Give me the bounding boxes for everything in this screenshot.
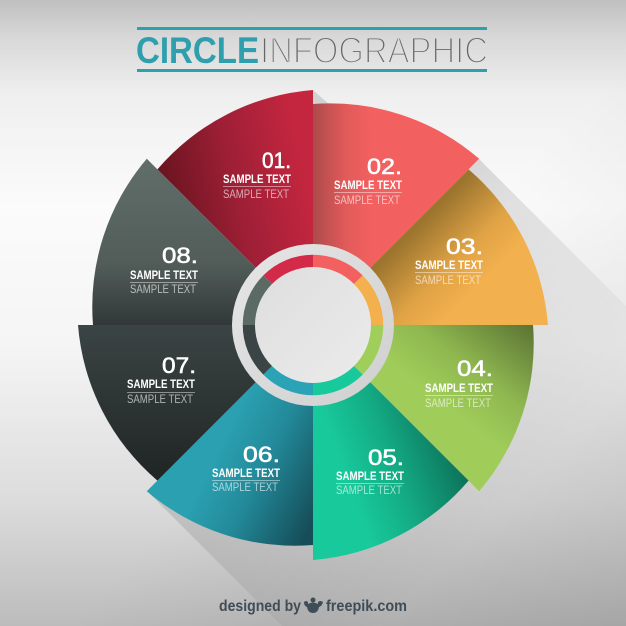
label 06 bbox=[212, 468, 280, 494]
number 08: 08. bbox=[162, 243, 198, 268]
number 02: 02. bbox=[367, 154, 402, 179]
label 08 bbox=[130, 270, 198, 296]
label 04: SAMPLE TEXT bbox=[425, 398, 491, 410]
footer credit bbox=[219, 598, 407, 615]
label 08: SAMPLE TEXT bbox=[130, 270, 198, 282]
label 02 bbox=[334, 180, 402, 207]
label 07: SAMPLE TEXT bbox=[127, 379, 195, 391]
label 02: SAMPLE TEXT bbox=[334, 180, 402, 192]
center ring bbox=[232, 244, 394, 406]
label 02: SAMPLE TEXT bbox=[334, 195, 400, 207]
number 06: 06. bbox=[243, 442, 280, 467]
label 05: SAMPLE TEXT bbox=[336, 471, 404, 483]
panel: 05 bbox=[313, 325, 469, 560]
label 07 bbox=[127, 379, 195, 406]
number 04: 04. bbox=[457, 356, 493, 381]
label 03: SAMPLE TEXT bbox=[415, 260, 483, 272]
title word: CIRCLE: CIRCLE bbox=[136, 30, 259, 71]
label 01 bbox=[223, 174, 291, 201]
label 07: SAMPLE TEXT bbox=[127, 394, 193, 406]
title bbox=[136, 27, 488, 72]
footer credit: designed by bbox=[219, 598, 301, 615]
label 01: SAMPLE TEXT bbox=[223, 189, 289, 201]
label 04: SAMPLE TEXT bbox=[425, 383, 493, 395]
label 06: SAMPLE TEXT bbox=[212, 468, 280, 480]
panel: 06 bbox=[147, 325, 313, 546]
top step shadow bbox=[313, 90, 330, 105]
panel: 03 bbox=[313, 169, 548, 325]
inner circle bbox=[255, 267, 371, 383]
panel: 07 bbox=[78, 325, 313, 481]
label 08: SAMPLE TEXT bbox=[130, 284, 196, 296]
footer credit: freepik.com bbox=[326, 598, 407, 615]
icon: freepik crown bbox=[304, 598, 323, 613]
number 01: 01. bbox=[262, 148, 291, 173]
label 06: SAMPLE TEXT bbox=[212, 482, 278, 494]
ring segments bbox=[249, 261, 377, 389]
number 05: 05. bbox=[368, 445, 404, 470]
label 04 bbox=[425, 383, 493, 410]
panel: 01 bbox=[157, 90, 313, 325]
label 03: SAMPLE TEXT bbox=[415, 275, 481, 287]
label 03 bbox=[415, 260, 483, 287]
long shadow of the circle bbox=[147, 159, 626, 626]
number 03: 03. bbox=[446, 234, 483, 259]
panel: 02 bbox=[313, 103, 479, 325]
number 07: 07. bbox=[162, 353, 196, 378]
title word: INFOGRAPHIC: INFOGRAPHIC bbox=[260, 29, 488, 71]
label 01: SAMPLE TEXT bbox=[223, 174, 291, 186]
label 05 bbox=[336, 471, 404, 497]
panel: 08 bbox=[92, 159, 313, 325]
label 05: SAMPLE TEXT bbox=[336, 485, 402, 497]
panel: 04 bbox=[313, 325, 534, 491]
